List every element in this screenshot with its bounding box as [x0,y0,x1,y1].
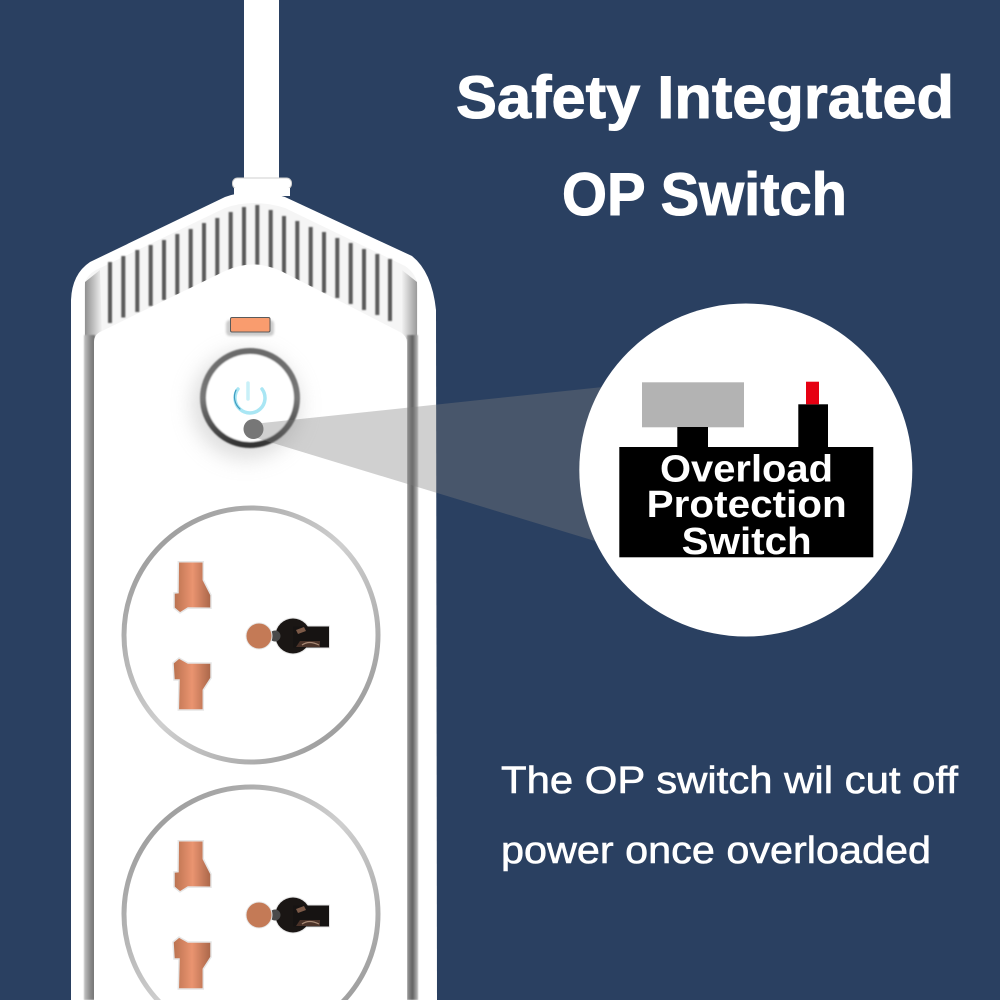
red pin [806,382,819,404]
indicator dot [244,419,264,439]
socket 1 [124,508,378,762]
side channel right [407,335,418,1000]
description: The OP switch wil cut off [501,760,958,802]
power button [192,351,300,459]
switch label [647,449,847,563]
switch label: Switch [682,521,812,563]
title [456,64,954,228]
callout circle: overload switch diagram [579,304,912,636]
switch body [619,447,873,557]
indicator light [226,318,274,336]
socket 2 [124,787,378,1000]
vent shading left [85,270,102,345]
switch label: Overload [660,449,833,491]
vent shading right [402,270,417,345]
power strip [71,0,437,1000]
front face panel [94,264,407,1000]
strip body [71,192,437,1000]
side channel left [84,335,95,1000]
power cable [232,0,292,196]
ventilation fins [110,205,390,323]
vent recess [84,203,418,1000]
description: power once overloaded [501,830,931,872]
switch label: Protection [647,484,847,526]
icon: power symbol [234,383,265,413]
right post [798,404,828,448]
reset button cap [642,382,744,427]
button stem [677,427,708,448]
description [501,760,958,872]
title: Safety Integrated [456,64,954,131]
title: OP Switch [562,161,847,228]
callout beam [253,387,603,541]
